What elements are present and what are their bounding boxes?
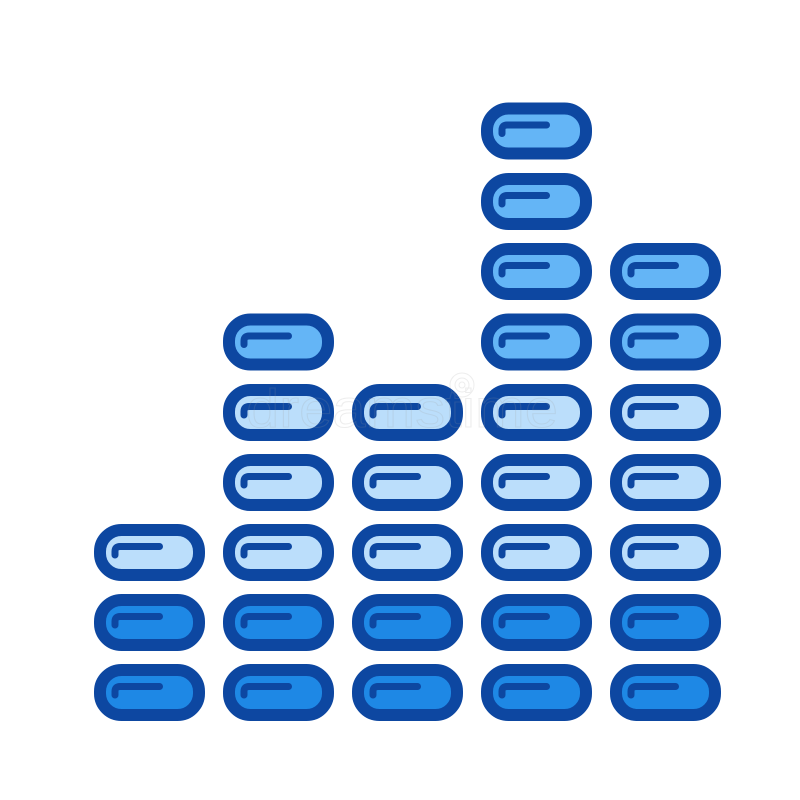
column 1	[100, 530, 199, 715]
column 2	[229, 320, 328, 715]
column 3	[358, 390, 457, 715]
watermark: dreamstime	[246, 379, 558, 439]
column 4	[487, 108, 586, 715]
column 5	[616, 249, 715, 715]
